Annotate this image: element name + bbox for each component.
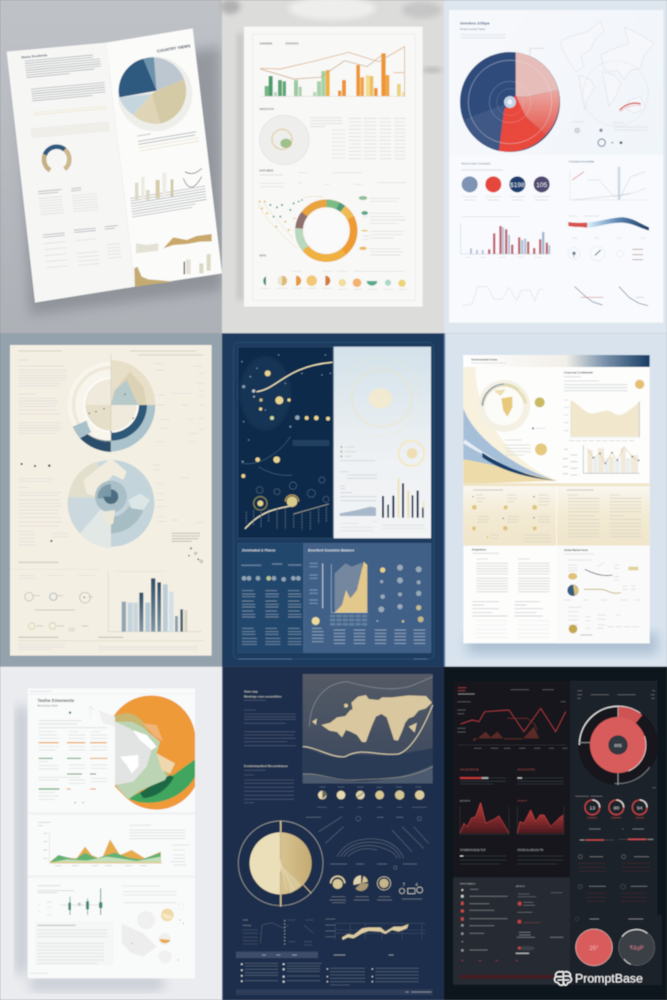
gold arcs xyxy=(242,362,332,528)
lower right charts: Global Market Asset xyxy=(564,549,588,552)
section divider xyxy=(28,813,195,877)
upper radial chart xyxy=(68,353,155,453)
title: Teshe Emonents xyxy=(37,698,75,703)
kpi progress bars: VALUE RANGE xyxy=(460,768,479,772)
stat badges: Business Metric Sustainable xyxy=(461,162,491,165)
lower left text: Integrations xyxy=(472,549,487,552)
gold circles xyxy=(532,397,547,455)
data table xyxy=(310,118,405,159)
bar chart with lines xyxy=(260,47,405,97)
gold gauge icons: 7 xyxy=(403,882,406,887)
bottom list: PERFORMANCE xyxy=(460,882,476,885)
lower right panel xyxy=(304,543,431,653)
row of small charts xyxy=(260,271,407,289)
dot markers xyxy=(21,463,52,542)
dark star map panel xyxy=(238,347,333,538)
gold orbit rings xyxy=(341,357,424,466)
small line chart: Summary xyxy=(243,924,251,927)
line chart top right xyxy=(569,160,649,200)
report sheet xyxy=(28,688,195,978)
donut chart xyxy=(44,147,69,172)
three stat rings: 80 xyxy=(614,805,619,811)
small icon row xyxy=(568,246,643,261)
bottom header bar xyxy=(236,952,394,958)
left brochure page xyxy=(7,43,135,303)
poster sheet xyxy=(244,27,423,307)
lower globe chart xyxy=(68,458,154,548)
panel: blue and red radial dashboard xyxy=(444,0,667,333)
ring legend xyxy=(359,196,405,255)
lower left text block xyxy=(35,922,113,965)
right heading and text: Corporate Confidential xyxy=(564,371,593,375)
dashboard sheet xyxy=(449,10,663,323)
header gradient bar xyxy=(463,355,650,367)
lower bars xyxy=(184,254,211,274)
headings: DATA INDEX xyxy=(260,169,274,172)
lower area chart xyxy=(309,562,368,624)
gold gauge icons: 4 xyxy=(415,882,418,887)
left column text xyxy=(18,360,67,433)
footer bar xyxy=(236,989,433,995)
band: right paragraphs xyxy=(568,495,641,537)
circle row xyxy=(317,787,427,807)
left swoosh art xyxy=(463,367,557,484)
sparkline left xyxy=(462,287,544,306)
right annotations lower xyxy=(153,465,203,523)
bottom lists xyxy=(241,963,419,985)
small dots xyxy=(241,354,331,463)
heading block: Meetings ones assemblies xyxy=(244,694,282,698)
light panel notes xyxy=(340,446,377,501)
right progress rows xyxy=(580,829,653,840)
light chart panel xyxy=(334,347,431,538)
left page text xyxy=(21,48,125,268)
middle text strip xyxy=(260,173,406,187)
heading block xyxy=(244,690,296,803)
small line chart: Graph xyxy=(243,919,248,922)
radial scatter circle xyxy=(260,115,309,165)
globe gauge xyxy=(478,380,530,432)
captions under area charts: STORM-FORCE TOT xyxy=(460,848,486,852)
arc diagram xyxy=(306,816,429,869)
small bar chart xyxy=(135,173,173,201)
small text block xyxy=(505,440,531,455)
lower right map xyxy=(122,886,184,963)
gold gauge icons xyxy=(329,875,423,903)
ring chart xyxy=(577,691,657,788)
small line chart xyxy=(243,919,314,945)
bottom right gauges: 26° xyxy=(589,944,599,952)
cream band xyxy=(463,483,650,546)
gold nodes xyxy=(241,370,330,478)
panel: white and cream environmental report xyxy=(444,333,667,667)
bottom left sheet xyxy=(453,877,570,985)
red area chart two xyxy=(517,800,564,834)
section rule and label xyxy=(10,562,100,569)
panel: navy and gold infographic: Excellent Sunshine Balance xyxy=(308,549,354,553)
panel: orange and green globe report xyxy=(0,667,222,1000)
large pie gauge xyxy=(238,821,323,907)
headings: STATISTICS xyxy=(285,42,299,45)
constellation xyxy=(188,547,203,563)
panel: green and orange report on marble xyxy=(220,0,444,333)
lower left text columns xyxy=(242,591,301,644)
stat badges: 105 xyxy=(536,182,548,189)
stat badges: $198 xyxy=(510,182,525,189)
headings: OVERVIEW xyxy=(260,43,273,45)
line chart top right: A Sustained Accessibility xyxy=(569,160,595,163)
grouped bar chart xyxy=(461,217,551,257)
bottom right gauges xyxy=(570,915,662,985)
stat badges xyxy=(461,162,550,200)
band: left items xyxy=(472,490,593,542)
headings: RESULTS BY xyxy=(260,109,275,111)
PromptBase logo: PromptBase xyxy=(575,972,643,986)
three stat rings: 13 xyxy=(590,805,595,811)
combo bar and line chart xyxy=(563,445,640,475)
cream sheet xyxy=(10,345,212,656)
headers xyxy=(18,351,203,355)
bottom right gauges: ₹&gP xyxy=(630,944,644,951)
right small tiles xyxy=(578,855,651,901)
area chart xyxy=(38,822,162,866)
right annotations upper xyxy=(153,363,205,442)
small circle diagrams xyxy=(18,575,95,631)
right page text xyxy=(113,43,209,217)
left dark sheet xyxy=(453,681,570,877)
small label block xyxy=(293,440,329,446)
red area chart one: AUDIENCE xyxy=(460,799,471,802)
gold medallion xyxy=(312,617,324,642)
header gradient bar: Environmental Assets xyxy=(471,359,498,362)
light footer text xyxy=(340,522,425,531)
map panel xyxy=(303,674,433,783)
title xyxy=(37,698,75,714)
lower right charts xyxy=(557,546,650,643)
bottom bar chart xyxy=(108,571,202,632)
area chart text xyxy=(129,825,190,865)
red area chart one xyxy=(460,799,509,834)
report sheet xyxy=(463,355,650,643)
title: Best Susay Charts xyxy=(37,705,59,708)
right heading and text xyxy=(564,371,644,391)
corner mountain graph xyxy=(134,267,173,287)
globe circle chart xyxy=(87,695,195,810)
gauge sketch xyxy=(183,168,202,187)
heading block: Combining Next Dissemblance xyxy=(244,764,288,768)
captions under area charts xyxy=(460,848,563,864)
pie chart xyxy=(118,57,192,131)
lower left text xyxy=(472,549,550,637)
captions under area charts: STATE IN ARSON TR xyxy=(517,848,543,852)
gold badges xyxy=(246,477,329,530)
panel: cream infographic with radial charts xyxy=(0,333,222,667)
title xyxy=(460,20,506,38)
lower right columns xyxy=(334,630,425,643)
panel: navy and gold infographic: Dominated & Places xyxy=(242,549,276,553)
right brochure page xyxy=(106,28,222,287)
right page text: COUNTRY VIEWS xyxy=(157,43,191,54)
radial pie xyxy=(460,48,560,152)
title: Gemtins 2/30pa xyxy=(460,20,490,25)
map controls xyxy=(572,122,647,146)
sparklines right xyxy=(575,287,648,306)
red area chart two: REVENUE xyxy=(517,800,528,802)
panel: navy and gold infographic xyxy=(222,333,444,667)
left column text lower xyxy=(18,479,68,545)
kpi progress bars: ACCOUNTING xyxy=(517,768,535,772)
lower left panel xyxy=(238,543,303,653)
panel: folded brochure with pie chart xyxy=(0,0,222,333)
title: Present number Travel xyxy=(460,28,486,31)
three stat rings xyxy=(575,796,647,818)
large ring chart xyxy=(299,203,354,258)
gold zigzag chart xyxy=(325,919,425,940)
text grid with coloured rules xyxy=(39,721,107,803)
headings xyxy=(260,42,299,258)
black and gold bars xyxy=(382,483,424,518)
footer xyxy=(239,657,427,660)
ring chart: 805 xyxy=(614,743,622,748)
heading block: Start step xyxy=(244,690,258,694)
cream area chart xyxy=(564,400,640,441)
light area chart xyxy=(340,507,376,516)
area chart xyxy=(136,234,212,253)
three stat rings: 94 xyxy=(637,805,643,811)
icon grid xyxy=(376,565,424,623)
world map outline xyxy=(561,21,655,126)
footer text xyxy=(18,637,203,649)
ribbon chart xyxy=(568,216,649,238)
headings: NOTE xyxy=(260,256,267,258)
right dark sheet xyxy=(570,681,657,915)
dot swarm xyxy=(259,199,303,241)
panel: dark navy report with gold map xyxy=(222,667,444,1000)
bottom list xyxy=(460,882,563,977)
lower left icons xyxy=(241,564,301,582)
bottom list: METRICS xyxy=(516,886,526,888)
kpi progress bars xyxy=(460,768,563,784)
gold land xyxy=(321,695,432,742)
top line chart xyxy=(457,708,566,745)
left page text: Wacky Excellentia xyxy=(21,53,48,59)
top labels xyxy=(457,688,567,748)
panel: dark red analytics dashboard xyxy=(444,667,667,1000)
small bar chart xyxy=(37,886,102,915)
